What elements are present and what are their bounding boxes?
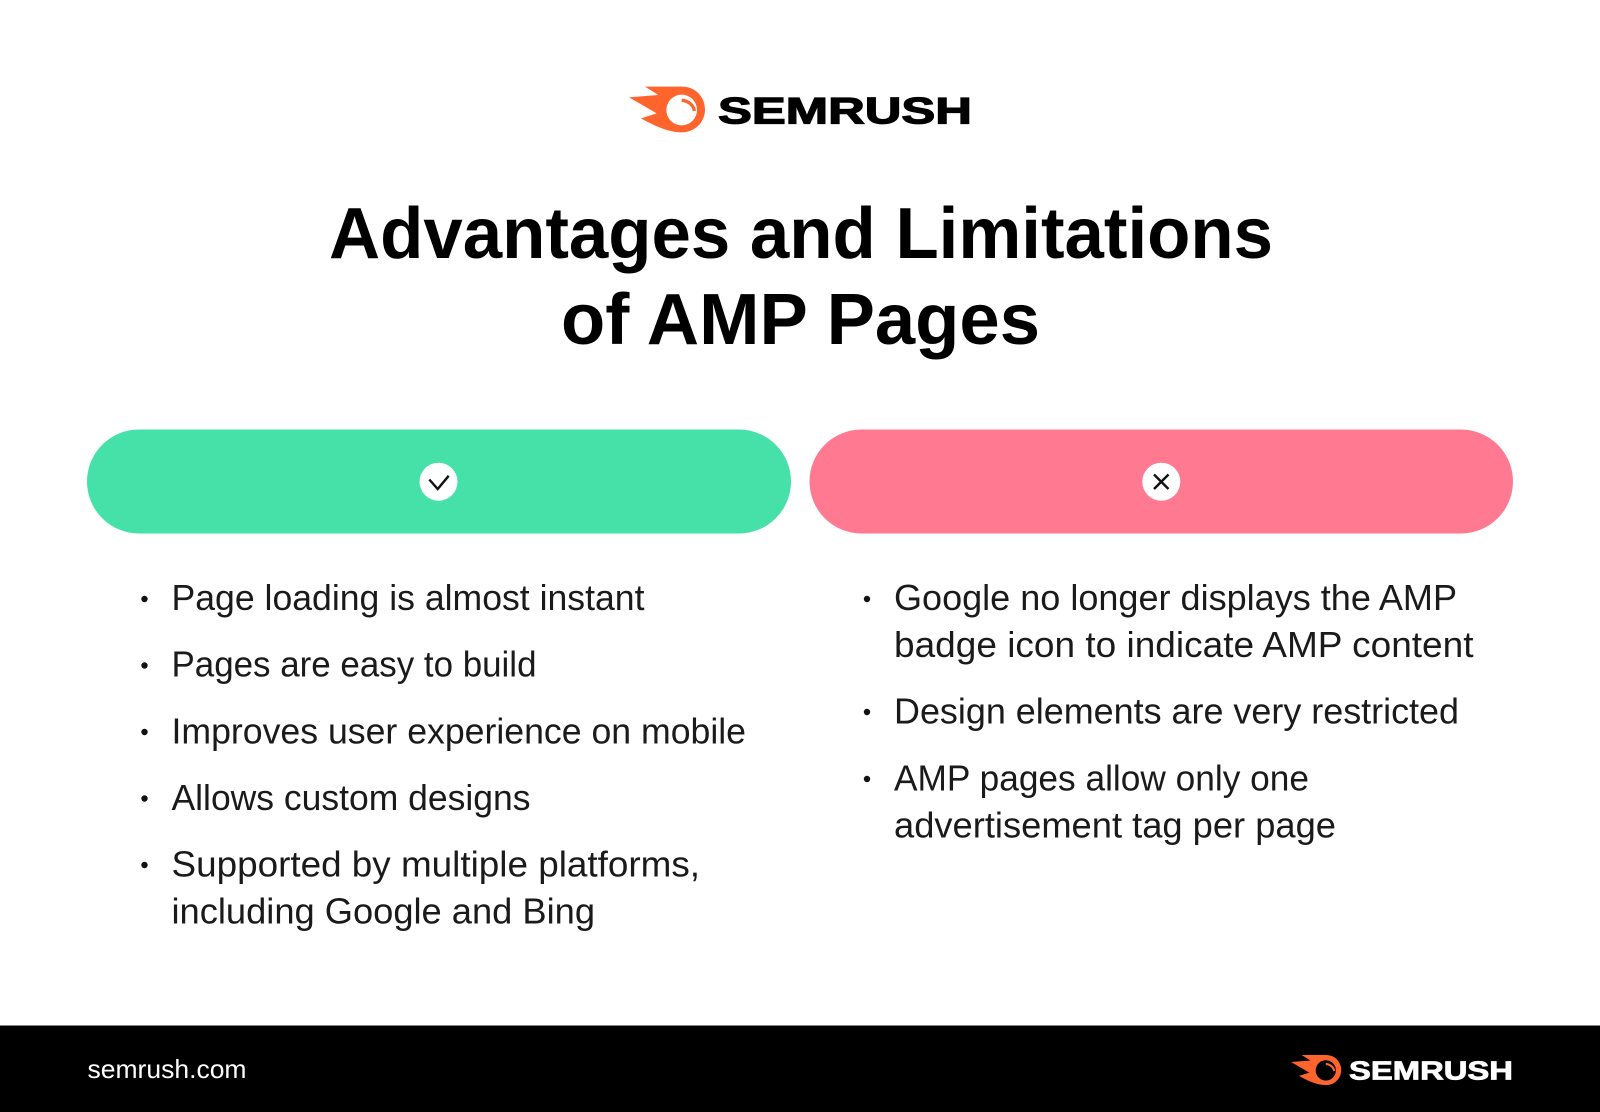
list: limitations: Google no longer displays the AMP — [894, 577, 1457, 618]
list: limitations: Design elements are very restricted — [894, 690, 1459, 732]
list: limitations: AMP pages allow only one — [894, 758, 1309, 798]
list: limitations — [864, 577, 1474, 846]
list: advantages: Improves user experience on mobile — [172, 710, 746, 752]
list: advantages: including Google and Bing — [172, 890, 595, 932]
title: of AMP Pages — [561, 280, 1040, 360]
title — [329, 194, 1273, 360]
footer url: semrush.com — [88, 1054, 246, 1084]
list: advantages: Supported by multiple platforms, — [172, 844, 700, 884]
icon: cross mark — [1142, 463, 1180, 501]
logo: Semrush footer — [1291, 1055, 1513, 1086]
icon: check mark — [420, 463, 458, 501]
list: advantages: Allows custom designs — [172, 777, 530, 818]
footer wordmark: SEMRUSH — [1349, 1056, 1513, 1086]
icon: footer flame — [1291, 1055, 1341, 1085]
list: limitations: advertisement tag per page — [894, 804, 1336, 846]
panel: advantages header — [87, 430, 791, 534]
logo wordmark: SEMRUSH — [718, 90, 972, 132]
footer bar — [0, 1026, 1600, 1112]
list: limitations: badge icon to indicate AMP content — [894, 624, 1474, 665]
logo: Semrush header — [629, 87, 972, 132]
panel: limitations header — [810, 430, 1513, 534]
list: advantages — [141, 577, 746, 932]
list: advantages: Pages are easy to build — [172, 644, 536, 684]
list: advantages: Page loading is almost instant — [172, 577, 644, 618]
icon: flame — [629, 87, 705, 132]
title: Advantages and Limitations — [329, 194, 1273, 274]
